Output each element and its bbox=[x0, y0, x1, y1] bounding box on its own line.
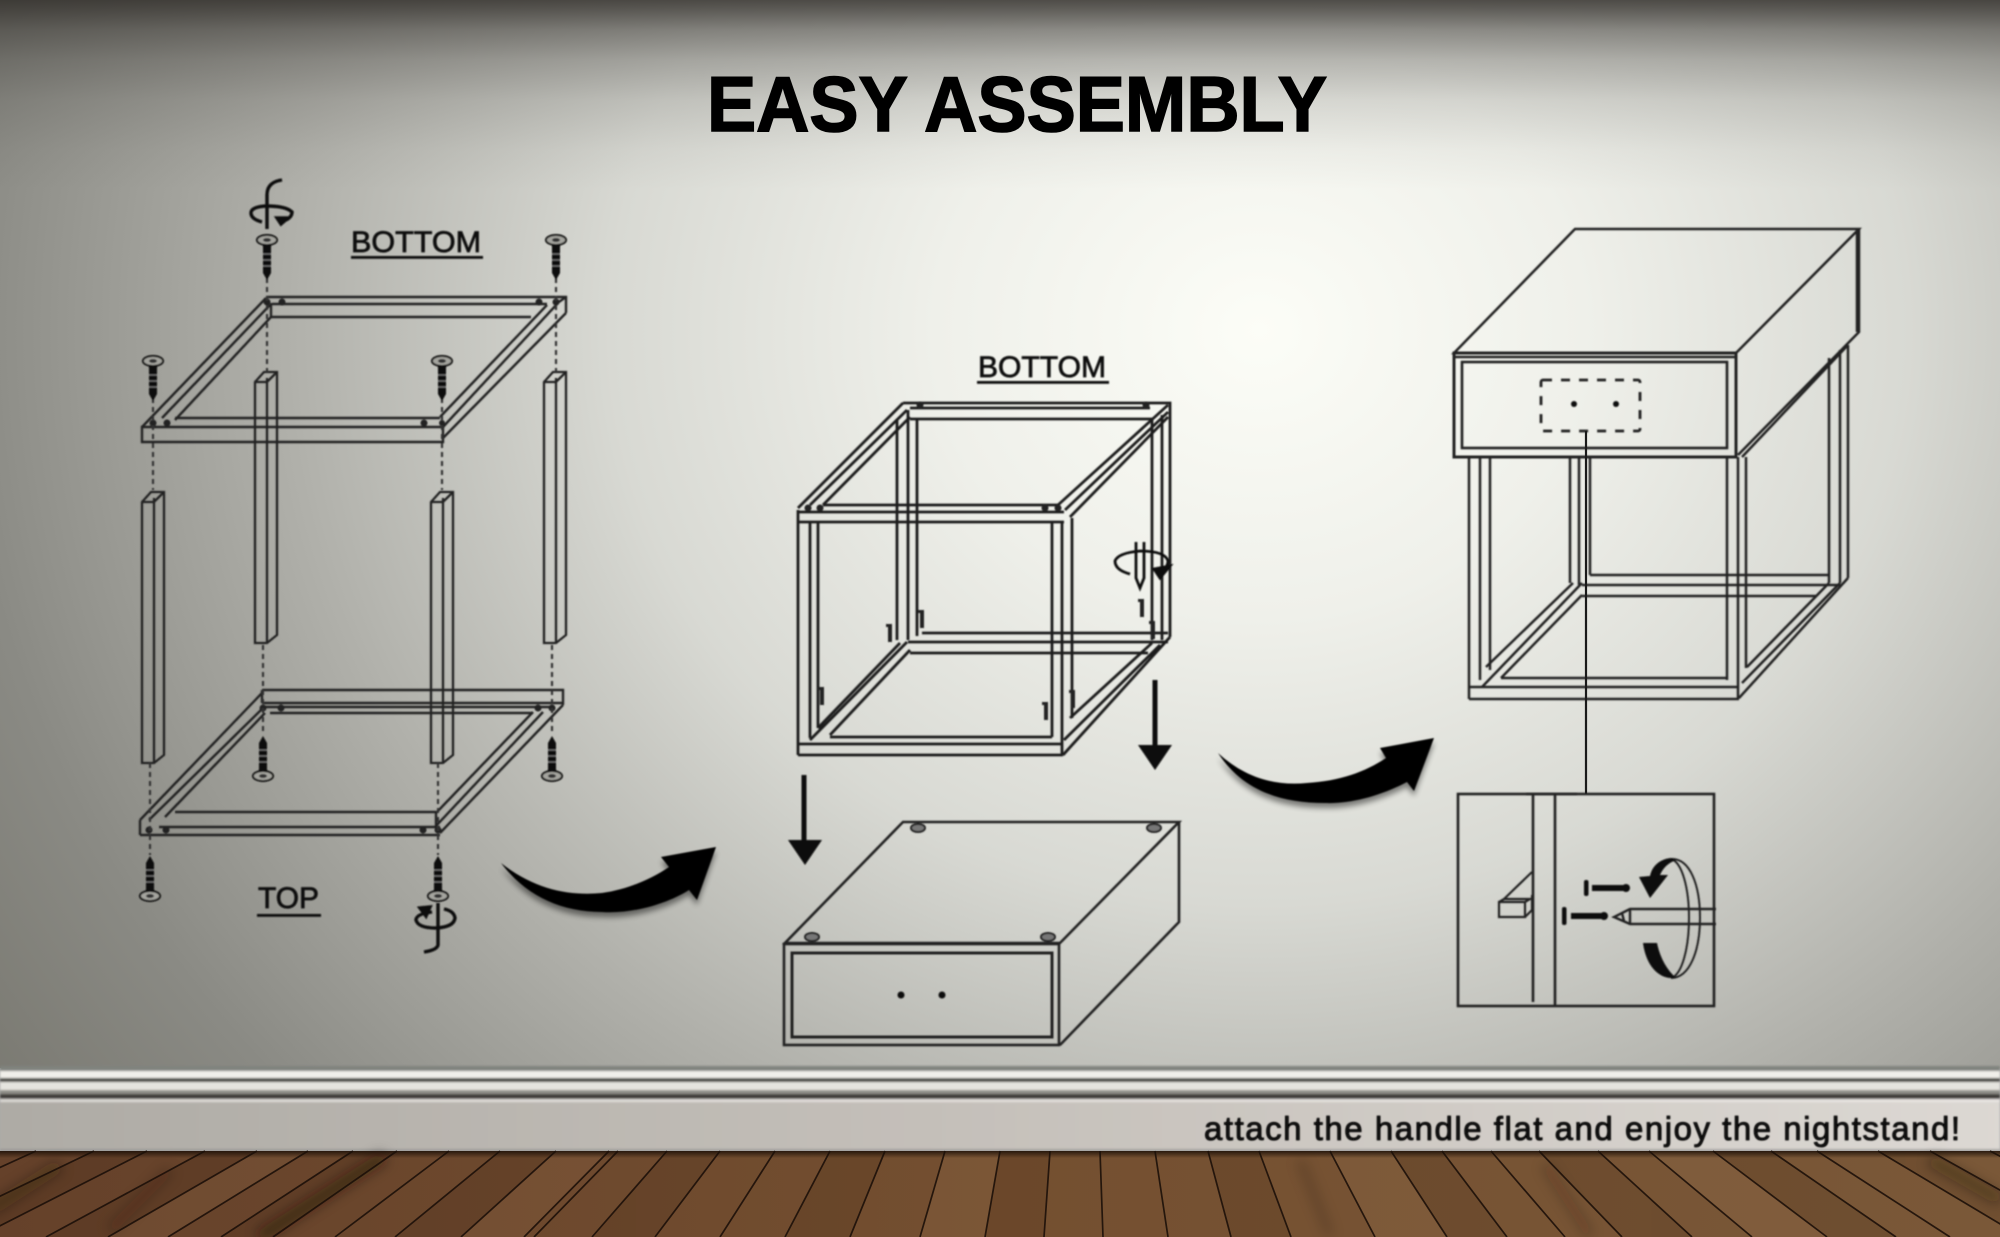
icon: screwdriver turning bbox=[1115, 542, 1170, 588]
inset frame bbox=[1458, 794, 1714, 1006]
frame bbox=[798, 402, 1170, 755]
legs bbox=[1469, 345, 1848, 699]
screws bbox=[1562, 880, 1630, 925]
upper frame bbox=[142, 297, 566, 442]
diagram: drawer cabinet bbox=[784, 822, 1179, 1045]
handle position bbox=[1541, 380, 1640, 431]
handle bbox=[1499, 872, 1532, 917]
diagram: assembled frame bbox=[798, 351, 1170, 755]
lower frame bbox=[1469, 575, 1848, 699]
title: EASY ASSEMBLY bbox=[707, 60, 1327, 148]
screwdriver bbox=[1614, 909, 1716, 924]
rotation arrow bbox=[1639, 858, 1700, 978]
wooden floor bbox=[0, 1151, 2000, 1237]
label: BOTTOM: BOTTOM bbox=[351, 226, 481, 259]
arrow: step two to step three bbox=[1218, 738, 1434, 808]
small screws bbox=[818, 599, 1155, 720]
upper screws bbox=[143, 235, 566, 401]
label: BOTTOM: BOTTOM bbox=[978, 351, 1106, 384]
leader line to detail bbox=[1585, 431, 1587, 794]
diagram: finished nightstand bbox=[1454, 229, 1859, 699]
arrow: frame down onto cabinet left bbox=[788, 775, 822, 865]
dashed guide lines bbox=[150, 278, 556, 855]
icon: hex key turning, top bbox=[251, 180, 292, 229]
icon: hex key turning, bottom bbox=[416, 903, 455, 952]
lower frame bbox=[140, 690, 563, 835]
four legs bbox=[142, 372, 566, 763]
baseboard bbox=[0, 1066, 2000, 1151]
leg section bbox=[1526, 794, 1577, 1006]
diagram: exploded frame and legs bbox=[140, 180, 566, 952]
detail inset: fixing the handle bbox=[1458, 794, 1716, 1006]
arrow: frame down onto cabinet right bbox=[1138, 680, 1172, 770]
label: TOP: TOP bbox=[258, 882, 319, 915]
lower screws bbox=[140, 736, 562, 901]
arrow: step one to step two bbox=[501, 847, 716, 917]
cabinet bbox=[1454, 229, 1859, 457]
caption: attach the handle flat and enjoy the nightstand! bbox=[1204, 1110, 1960, 1147]
